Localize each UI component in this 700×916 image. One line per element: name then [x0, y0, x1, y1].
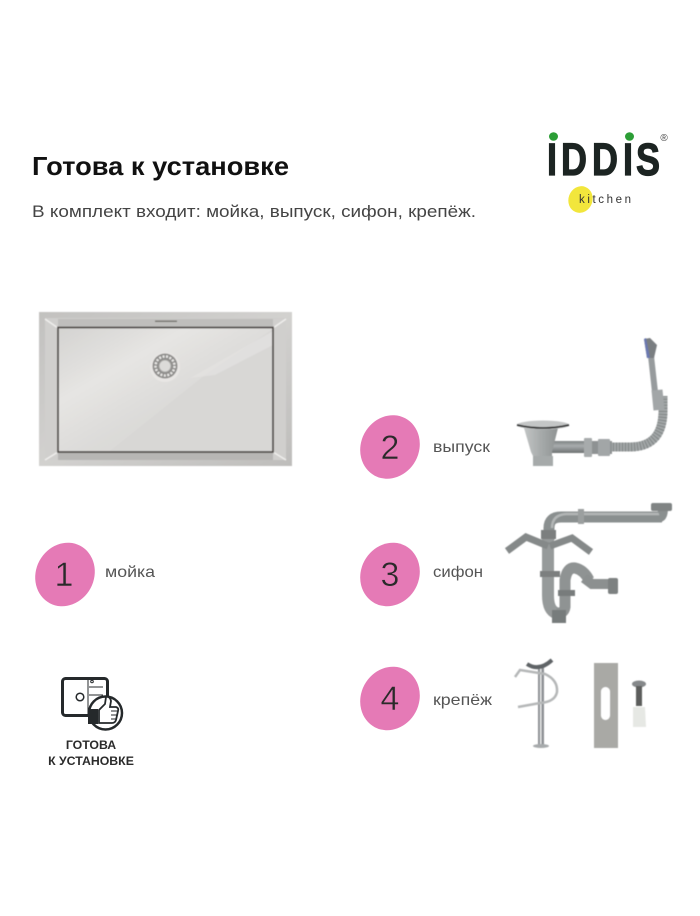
number 1 with label — [24, 532, 155, 617]
sink label plate — [155, 320, 177, 322]
number 3 with label — [349, 532, 483, 617]
strainer flange — [517, 420, 569, 430]
ready to install badge — [48, 678, 134, 768]
pink blob 2 — [349, 405, 431, 489]
pink blob 1 — [24, 532, 106, 617]
plate slot — [601, 687, 610, 720]
number 1: 1 — [55, 556, 73, 594]
vertical pipe — [548, 532, 556, 613]
logo green dots — [549, 132, 634, 141]
sink photo — [39, 312, 292, 466]
right outlet — [584, 578, 612, 584]
logo yellow blob — [565, 183, 596, 216]
bottom cap — [552, 610, 566, 623]
trap bend — [556, 568, 589, 613]
branch nozzles — [507, 537, 548, 551]
logo wordmark: IDDIS — [547, 134, 660, 185]
outlet side pipe — [552, 441, 592, 453]
clamp wire — [515, 670, 557, 707]
title: Готова к установке — [32, 151, 289, 181]
label выпуск: выпуск — [433, 439, 491, 456]
logo: IDDIS kitchen — [547, 132, 668, 216]
fasteners photo — [515, 660, 646, 748]
plastic plug — [633, 707, 646, 727]
sink side walls — [45, 319, 286, 328]
number 4: 4 — [381, 680, 399, 718]
label мойка: мойка — [105, 564, 155, 581]
logo registered mark: ® — [660, 133, 668, 144]
corrugated hose — [610, 396, 663, 447]
drain outlet photo — [517, 338, 663, 466]
icon: thumb up — [88, 696, 122, 730]
overflow tube — [651, 356, 655, 392]
badge caption: ГОТОВА — [66, 738, 116, 752]
sink rim — [39, 312, 292, 466]
pink blob 4 — [349, 656, 431, 741]
number 2 with label — [349, 405, 491, 489]
number 2: 2 — [381, 429, 399, 467]
number 3: 3 — [381, 556, 399, 594]
logo kitchen text: kitchen — [579, 194, 631, 206]
label крепёж: крепёж — [433, 692, 492, 709]
strainer body — [524, 428, 558, 458]
subtitle: В комплект входит: мойка, выпуск, сифон, крепёж. — [32, 202, 476, 221]
screw — [632, 680, 646, 688]
pink blob 3 — [349, 532, 431, 617]
couplings — [541, 530, 556, 539]
top right elbow — [660, 508, 663, 517]
clamp bolt — [538, 668, 544, 746]
icon: sink panel — [62, 678, 108, 716]
overflow head — [644, 338, 657, 358]
siphon photo — [507, 503, 672, 623]
number 4 with label — [349, 656, 492, 741]
top coupling — [578, 509, 584, 524]
sink basin — [58, 328, 273, 452]
badge caption: К УСТАНОВКЕ — [48, 754, 134, 768]
label сифон: сифон — [433, 564, 483, 581]
top horizontal pipe — [549, 517, 662, 540]
clamp plate — [594, 663, 618, 748]
sink drain — [150, 352, 180, 382]
